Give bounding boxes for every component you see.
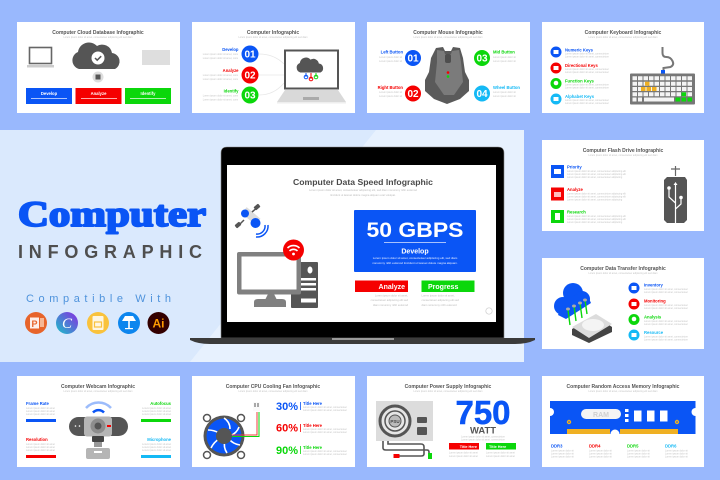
card: computer random access memory infographic xyxy=(542,376,704,467)
item: autofocus: Autofocus xyxy=(150,401,172,406)
stat: 30% xyxy=(276,401,347,413)
slide: computer data speed infographic xyxy=(227,165,496,322)
item: resource: Lorem ipsum dolor sit amet, consectetuer xyxy=(644,336,688,338)
item: inventory: Lorem ipsum dolor sit amet, consectetuer xyxy=(644,288,688,291)
illustration: ram module: RAM xyxy=(593,412,609,419)
item: resolution: Lorem ipsum dolor sit amet xyxy=(26,449,55,452)
item: microphone: Lorem ipsum dolor sit amet xyxy=(142,449,171,452)
item: resolution xyxy=(26,437,56,458)
item: analyze xyxy=(203,66,258,84)
slide heading: Computer Data Speed Infographic xyxy=(293,177,433,187)
item: priority: Priority xyxy=(567,164,582,170)
subtitle text: Lorem ipsum dolor sit amet, consectetuer adipiscing elit sed diam xyxy=(413,36,483,39)
icon: powerpoint: P xyxy=(31,319,38,329)
item: inventory: Inventory xyxy=(644,282,664,288)
item: analyze: Lorem ipsum dolor sit amet, consectetuer adipiscing xyxy=(567,198,623,202)
item: identify xyxy=(203,86,258,104)
stat: 30%: Lorem ipsum dolor sit amet, consectetuer xyxy=(303,406,347,409)
heading: Computer Data Transfer Infographic xyxy=(580,266,666,272)
subtitle text: Lorem ipsum dolor sit amet, consectetuer adipiscing elit sed diam xyxy=(63,36,133,39)
heading: Computer Random Access Memory Infographic xyxy=(567,384,680,390)
item: analyze: Lorem ipsum dolor sit amet, consectetuer adipiscing elit xyxy=(567,196,626,198)
illustration: keyboard xyxy=(630,47,695,104)
item: alphabet keys: Lorem ipsum dolor sit amet, consectetuer xyxy=(565,102,609,105)
card: computer keyboard infographic xyxy=(542,22,704,113)
heading: Computer Power Supply Infographic xyxy=(405,384,492,390)
item: research: Research xyxy=(567,210,586,214)
item: numeric keys: Lorem ipsum dolor sit amet, consectetuer xyxy=(565,52,609,56)
item: priority xyxy=(551,164,626,179)
laptop mockup xyxy=(190,147,535,344)
item: identify: Lorem ipsum dolor sit amet, cons xyxy=(203,98,239,102)
item: right button: Lorem ipsum dolor sit xyxy=(379,91,402,94)
main title: computer: Computer xyxy=(18,194,206,234)
subtitle: infographic: INFOGRAPHIC xyxy=(18,242,202,262)
item: ddr6: DDR6 xyxy=(665,444,677,448)
item: ddr4: Lorem ipsum dolor sit xyxy=(589,456,612,458)
subtitle text: Lorem ipsum dolor sit amet, consectetuer adipiscing elit sed diam xyxy=(63,390,133,393)
item: analysis: Lorem ipsum dolor sit amet, consectetuer xyxy=(644,323,688,326)
illustration: power supply unit: PSU xyxy=(390,419,400,424)
item: ddr5: Lorem ipsum dolor sit xyxy=(627,452,650,456)
box: identify xyxy=(125,88,171,104)
item: autofocus: Lorem ipsum dolor sit amet xyxy=(142,407,171,410)
item: identify: Identify xyxy=(224,88,239,94)
icon: canva xyxy=(56,312,78,334)
box: analyze xyxy=(355,280,409,307)
stat: 90% xyxy=(276,445,347,457)
item: function keys: Function Keys xyxy=(565,78,595,84)
item: priority: Lorem ipsum dolor sit amet, consectetuer adipiscing xyxy=(567,176,623,179)
stat: 90%: Title Here xyxy=(303,445,323,450)
laptop base xyxy=(190,338,535,344)
item: develop: Lorem ipsum dolor sit amet, cons xyxy=(203,57,239,60)
item: develop: 01 xyxy=(244,50,256,60)
item: frame rate: Lorem ipsum dolor sit amet xyxy=(26,413,55,416)
item: autofocus: Lorem ipsum dolor sit amet xyxy=(142,413,171,416)
item: ddr5 xyxy=(627,444,650,458)
item: inventory: Lorem ipsum dolor sit amet, consectetuer xyxy=(644,291,688,294)
item: monitoring: Lorem ipsum dolor sit amet, consectetuer xyxy=(644,304,688,307)
icon: powerpoint xyxy=(25,312,47,334)
item: research xyxy=(551,210,626,224)
page marker xyxy=(486,308,492,314)
item: ddr3: Lorem ipsum dolor sit xyxy=(551,450,574,452)
item: analyze: Lorem ipsum dolor sit amet, cons xyxy=(203,74,239,77)
item: priority: Lorem ipsum dolor sit amet, consectetuer adipiscing elit xyxy=(567,173,626,176)
box: red title xyxy=(449,443,479,458)
item: mid button: Lorem ipsum dolor sit xyxy=(493,60,516,63)
box: analyze: Analyze xyxy=(91,91,107,96)
box: 50 gbps develop: Lorem ipsum dolor sit amet, consectetuer adipiscing elit, sed diam xyxy=(373,256,458,260)
item: research: Lorem ipsum dolor sit amet, consectetuer adipiscing elit xyxy=(567,215,626,218)
item: analyze: 02 xyxy=(244,70,256,82)
item: directional keys: Lorem ipsum dolor sit amet, consectetuer xyxy=(565,68,609,71)
item: right button xyxy=(378,85,421,102)
item: develop: Lorem ipsum dolor sit amet, cons xyxy=(203,53,239,56)
subtitle text: Lorem ipsum dolor sit amet, consectetuer adipiscing elit sed diam xyxy=(588,36,658,39)
item: ddr4: Lorem ipsum dolor sit xyxy=(589,450,612,452)
item: develop: Develop xyxy=(222,47,239,52)
item: alphabet keys: Alphabet Keys xyxy=(565,94,595,99)
item: analyze: Analyze xyxy=(223,68,239,73)
item: analyze: Analyze xyxy=(567,187,583,192)
heading: Computer CPU Cooling Fan Infographic xyxy=(226,384,320,390)
item: mid button: Mid Button xyxy=(493,50,515,54)
item: ddr6: Lorem ipsum dolor sit xyxy=(665,452,688,456)
item: left button: 01 xyxy=(407,54,419,64)
box: progress: Progress xyxy=(428,284,458,291)
item: numeric keys: Lorem ipsum dolor sit amet, consectetuer xyxy=(565,56,609,58)
item: resolution: Lorem ipsum dolor sit amet xyxy=(26,443,55,446)
item: analysis xyxy=(628,314,688,326)
stat: 60%: 60% xyxy=(276,422,298,434)
item: function keys xyxy=(550,78,609,90)
item: ddr4: Lorem ipsum dolor sit xyxy=(589,452,612,456)
item: resolution: Lorem ipsum dolor sit amet xyxy=(26,446,55,449)
stat: 90%: 90% xyxy=(276,445,298,457)
item: function keys: Lorem ipsum dolor sit amet, consectetuer xyxy=(565,86,609,90)
card: computer power supply infographic xyxy=(367,376,530,467)
box: analyze: consectetuer adipiscing elit sed xyxy=(371,298,408,302)
item: function keys: Lorem ipsum dolor sit amet, consectetuer xyxy=(565,84,609,86)
box: red title: Title Here xyxy=(460,445,477,449)
stat: 90%: Lorem ipsum dolor sit amet, consectetuer xyxy=(303,453,347,456)
box: 50 gbps develop: 50 GBPS xyxy=(366,218,464,242)
icon: cloud with check xyxy=(72,42,120,69)
item: left button xyxy=(379,50,421,66)
item: wheel button xyxy=(474,85,520,102)
item: analyze xyxy=(551,187,626,202)
item: numeric keys: Numeric Keys xyxy=(565,48,594,52)
illustration: cloud xyxy=(554,283,591,325)
stat: 30%: 30% xyxy=(276,401,298,413)
slide subtitle: tincidunt ut laoreet dolore magna aliquam erat volutpat. xyxy=(330,193,396,197)
illustration: webcam xyxy=(69,403,128,459)
item: ddr6: Lorem ipsum dolor sit xyxy=(665,456,688,458)
item: microphone: Lorem ipsum dolor sit amet xyxy=(142,446,171,449)
icon: keynote xyxy=(118,312,140,334)
item: microphone: Microphone xyxy=(147,437,172,442)
item: monitoring: Monitoring xyxy=(644,298,666,304)
item: left button: Lorem ipsum dolor sit xyxy=(379,56,402,59)
item: mid button: Lorem ipsum dolor sit xyxy=(493,56,516,59)
item: numeric keys xyxy=(550,46,609,58)
box: green title: Title Here xyxy=(489,445,506,449)
item: resolution: Resolution xyxy=(26,437,48,442)
stat: 750 watt: WATT xyxy=(470,426,496,436)
item: analyze: Lorem ipsum dolor sit amet, cons xyxy=(203,78,239,81)
stat: 60%: Lorem ipsum dolor sit amet, consectetuer xyxy=(303,428,347,431)
stat: 750 watt: Lorem ipsum dolor sit amet, consectetuer xyxy=(461,438,505,442)
box: green title: Lorem ipsum dolor sit amet xyxy=(486,452,515,454)
heading: Computer Mouse Infographic xyxy=(413,30,483,36)
item: directional keys xyxy=(550,62,609,74)
box: analyze: diam nonummy nibh euismod xyxy=(373,303,409,307)
subtitle text: Lorem ipsum dolor sit amet, consectetuer adipiscing elit sed diam xyxy=(413,390,483,393)
item: inventory xyxy=(628,282,688,294)
box: 50 gbps develop: nonummy nibh euismod tincidunt ut laoreet dolore magna aliquam. xyxy=(372,261,458,265)
item: develop xyxy=(203,46,258,62)
heading: Computer Keyboard Infographic xyxy=(585,30,662,36)
illustration: cooling fan xyxy=(204,402,260,458)
subtitle text: Lorem ipsum dolor sit amet, consectetuer adipiscing elit sed diam xyxy=(588,272,658,275)
item: research: Lorem ipsum dolor sit amet, consectetuer adipiscing elit xyxy=(567,218,626,221)
item: ddr4 xyxy=(589,444,612,458)
item: left button: Left Button xyxy=(381,50,403,54)
item: autofocus xyxy=(141,401,172,422)
box: develop: Develop xyxy=(41,91,58,96)
illustration: hard drive xyxy=(572,314,612,343)
box: progress: consectetuer adipiscing elit sed xyxy=(422,298,459,302)
item: ddr6: Lorem ipsum dolor sit xyxy=(665,450,688,452)
slide subtitle: Lorem ipsum dolor sit amet, consectetuer adipiscing elit, sed diam nonummy nibh euismod xyxy=(309,188,417,192)
item: frame rate: Lorem ipsum dolor sit amet xyxy=(26,410,55,413)
box: progress xyxy=(422,280,474,307)
box: green title: Lorem ipsum dolor sit amet xyxy=(486,455,515,458)
illustration: mouse xyxy=(425,47,469,104)
card: computer flash drive infographic xyxy=(542,140,704,231)
item: ddr5: DDR5 xyxy=(627,444,639,448)
item: frame rate: Frame Rate xyxy=(26,401,49,406)
icon: adobe illustrator xyxy=(148,312,170,334)
heading: Computer Cloud Database Infographic xyxy=(52,30,144,36)
item: alphabet keys xyxy=(550,94,609,105)
item: ddr4: DDR4 xyxy=(589,444,601,448)
icon: desktop computer xyxy=(237,240,318,308)
box: green title xyxy=(486,443,516,458)
item: priority: Lorem ipsum dolor sit amet, consectetuer adipiscing elit xyxy=(567,170,626,173)
item: right button: Right Button xyxy=(378,85,403,90)
card: computer data transfer infographic xyxy=(542,258,704,349)
item: directional keys: Lorem ipsum dolor sit amet, consectetuer xyxy=(565,71,609,74)
item: wheel button: 04 xyxy=(476,89,488,100)
icon: canva: C xyxy=(62,316,73,332)
item: analysis: Lorem ipsum dolor sit amet, consectetuer xyxy=(644,320,688,323)
slide subtitle xyxy=(309,188,417,197)
icon: laptop xyxy=(27,48,54,68)
item: research: Lorem ipsum dolor sit amet, consectetuer adipiscing xyxy=(567,221,623,224)
item: ddr5: Lorem ipsum dolor sit xyxy=(627,456,650,458)
item: right button: 02 xyxy=(407,89,419,100)
item: ddr3: Lorem ipsum dolor sit xyxy=(551,456,574,458)
item: analysis: Analysis xyxy=(644,314,662,320)
box: red title: Lorem ipsum dolor sit amet xyxy=(449,452,478,454)
box: identify: Identify xyxy=(141,91,156,96)
item: ddr6 xyxy=(665,444,688,458)
box: progress: diam nonummy nibh euismod xyxy=(422,303,457,307)
box: 50 gbps develop: Develop xyxy=(401,248,429,256)
icons: compatible apps xyxy=(25,312,170,334)
item: right button: Lorem ipsum dolor sit xyxy=(379,95,402,98)
laptop bezel xyxy=(221,147,504,338)
item: ddr3 xyxy=(551,444,574,458)
stat: 30%: Lorem ipsum dolor sit amet, consectetuer xyxy=(303,409,347,412)
item: mid button: 03 xyxy=(476,54,488,64)
illustration: ram module xyxy=(546,401,700,438)
item: resource: Resource xyxy=(644,330,664,335)
icon: adobe illustrator: Ai xyxy=(152,316,164,330)
item: microphone xyxy=(141,437,172,458)
item: wheel button: Wheel Button xyxy=(493,85,520,90)
item: wheel button: Lorem ipsum dolor sit xyxy=(493,95,516,98)
connector lines xyxy=(259,54,284,95)
item: frame rate xyxy=(26,401,56,422)
box: analyze xyxy=(76,88,122,104)
illustration: laptop with cloud xyxy=(277,50,346,104)
label: compatible with: Compatible With xyxy=(26,293,171,305)
card: computer infographic xyxy=(192,22,355,113)
stat: 60%: Lorem ipsum dolor sit amet, consectetuer xyxy=(303,431,347,434)
hero panel background xyxy=(0,130,524,362)
card: computer webcam infographic xyxy=(17,376,180,467)
heading: Computer Flash Drive Infographic xyxy=(583,148,663,154)
item: frame rate: Lorem ipsum dolor sit amet xyxy=(26,407,55,410)
item: analyze: Lorem ipsum dolor sit amet, consectetuer adipiscing elit xyxy=(567,192,626,196)
stat: 60% xyxy=(276,422,347,434)
item: left button: Lorem ipsum dolor sit xyxy=(379,60,402,63)
item: identify: 03 xyxy=(244,90,256,102)
item: ddr3: DDR3 xyxy=(551,444,563,448)
item: ddr3: Lorem ipsum dolor sit xyxy=(551,452,574,456)
box: 50 gbps develop xyxy=(354,210,476,272)
stat: 60%: Title Here xyxy=(303,423,323,428)
heading: Computer Infographic xyxy=(247,30,299,36)
item: ddr5: Lorem ipsum dolor sit xyxy=(627,450,650,452)
item: monitoring: Lorem ipsum dolor sit amet, consectetuer xyxy=(644,307,688,310)
illustration: power supply unit xyxy=(376,401,433,459)
item: alphabet keys: Lorem ipsum dolor sit amet, consectetuer xyxy=(565,99,609,102)
stat: 750 watt: 750 xyxy=(456,394,510,431)
heading: Computer Webcam Infographic xyxy=(61,384,135,390)
box: red title: Lorem ipsum dolor sit amet xyxy=(449,455,478,458)
item: microphone: Lorem ipsum dolor sit amet xyxy=(142,443,171,446)
subtitle text: Lorem ipsum dolor sit amet, consectetuer adipiscing elit sed diam xyxy=(238,36,308,39)
placeholder box xyxy=(142,50,170,65)
icon: chip xyxy=(92,72,104,82)
icon: satellite xyxy=(234,204,268,237)
item: autofocus: Lorem ipsum dolor sit amet xyxy=(142,410,171,413)
item: mid button xyxy=(474,50,516,66)
icon: google slides xyxy=(87,312,109,334)
stat: 90%: Lorem ipsum dolor sit amet, consectetuer xyxy=(303,450,347,453)
box: analyze: Lorem ipsum dolor sit amet, xyxy=(375,294,408,298)
item: resource xyxy=(628,330,688,342)
item: wheel button: Lorem ipsum dolor sit xyxy=(493,91,516,94)
item: directional keys: Directional Keys xyxy=(565,63,598,68)
box: progress: Lorem ipsum dolor sit amet, xyxy=(422,294,455,298)
card: computer mouse infographic xyxy=(367,22,530,113)
box: analyze: Analyze xyxy=(379,284,405,291)
box: develop xyxy=(26,88,72,104)
item: monitoring xyxy=(628,298,688,310)
subtitle text: Lorem ipsum dolor sit amet, consectetuer adipiscing elit sed diam xyxy=(588,390,658,393)
item: identify: Lorem ipsum dolor sit amet, cons xyxy=(203,94,239,98)
card: cloud database infographic xyxy=(17,22,180,113)
card: computer cpu cooling fan infographic xyxy=(192,376,355,467)
illustration: usb drive xyxy=(664,166,687,223)
subtitle text: Lorem ipsum dolor sit amet, consectetuer adipiscing elit sed diam xyxy=(238,390,308,393)
stat: 750 watt: Lorem ipsum dolor sit amet, consectetuer xyxy=(461,436,505,438)
item: resource: Lorem ipsum dolor sit amet, consectetuer xyxy=(644,338,688,342)
subtitle text: Lorem ipsum dolor sit amet, consectetuer adipiscing elit sed diam xyxy=(588,154,658,157)
stat: 30%: Title Here xyxy=(303,401,323,406)
